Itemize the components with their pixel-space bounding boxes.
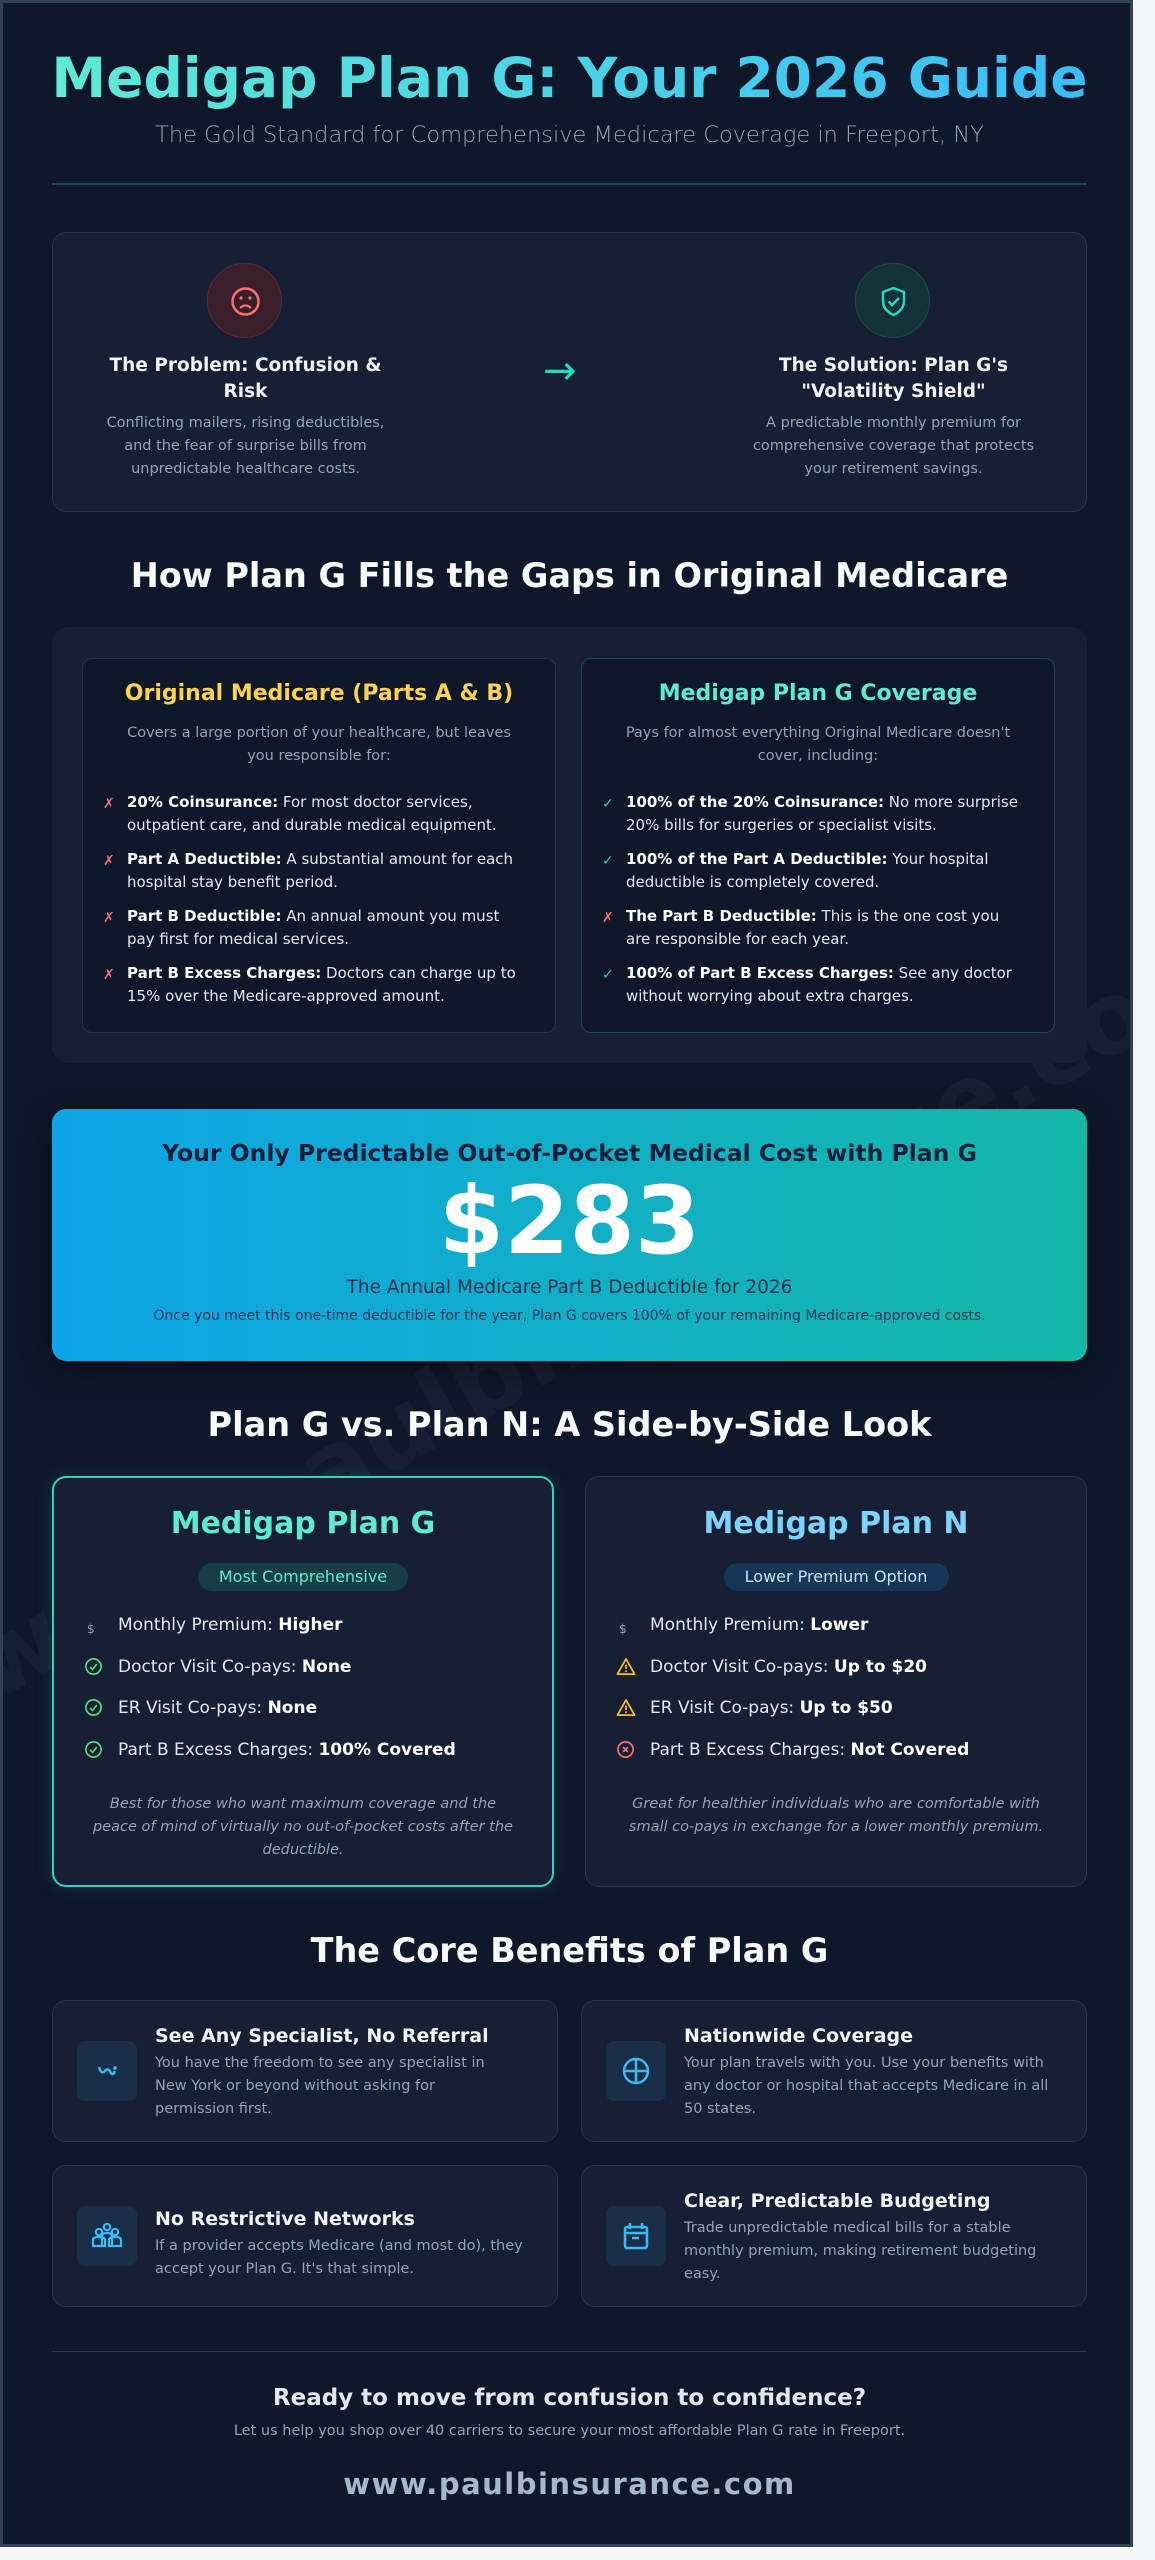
- card: original medicare: Part B Deductible: An annual amount you must pay first for medical services.: [127, 907, 499, 948]
- solution text: A predictable monthly premium for comprehensive coverage that protects your retirement savings.: [753, 415, 1034, 477]
- solution text: The Solution: Plan G's "Volatility Shield": [779, 355, 1008, 402]
- card: plan g coverage: Pays for almost everything Original Medicare doesn't cover, including:: [626, 725, 1010, 764]
- card: original medicare: ✗: [103, 967, 115, 983]
- heading: gaps: How Plan G Fills the Gaps in Original Medicare: [131, 556, 1008, 595]
- card: original medicare: ✗: [103, 796, 115, 812]
- card: plan n: $: [619, 1622, 627, 1636]
- card: plan g: Doctor Visit Co-pays: None: [118, 1656, 351, 1676]
- benefit: budgeting: Clear, Predictable Budgeting: [684, 2190, 990, 2212]
- icon: stethoscope: [77, 2041, 137, 2101]
- card: plan g coverage: 100% of the 20% Coinsurance: No more surprise 20% bills for surgeries or specialist visits.: [626, 793, 1018, 834]
- heading: core benefits: The Core Benefits of Plan G: [311, 1931, 828, 1970]
- problem text: The Problem: Confusion & Risk: [110, 355, 381, 402]
- banner: $283 deductible: Your Only Predictable Out-of-Pocket Medical Cost with Plan G: [162, 1139, 977, 1167]
- card: original medicare: [82, 658, 556, 1033]
- benefit: nationwide: [581, 2000, 1087, 2142]
- card: plan n: [585, 1476, 1087, 1887]
- icon: globe: [606, 2041, 666, 2101]
- banner: $283 deductible: The Annual Medicare Part B Deductible for 2026: [347, 1277, 792, 1298]
- banner: $283 deductible: [52, 1109, 1087, 1361]
- card: plan g coverage: Medigap Plan G Coverage: [659, 681, 977, 706]
- benefit: budgeting: [581, 2165, 1087, 2307]
- benefit: networks: No Restrictive Networks: [155, 2208, 415, 2230]
- card: plan n: Medigap Plan N: [703, 1506, 969, 1541]
- website url: www.paulbinsurance.com: [343, 2467, 796, 2501]
- card: plan n: Monthly Premium: Lower: [650, 1615, 868, 1635]
- card: original medicare: Part A Deductible: A substantial amount for each hospital stay benefit period.: [127, 850, 513, 891]
- benefit: specialist: You have the freedom to see any specialist in New York or beyond without asking for permission first.: [155, 2055, 485, 2117]
- badge: [724, 1563, 948, 1591]
- benefit: networks: [52, 2165, 558, 2307]
- subtitle: The Gold Standard for Comprehensive Medicare Coverage in Freeport, NY: [155, 122, 984, 148]
- banner: $283 deductible: $283: [439, 1167, 700, 1276]
- benefit: networks: If a provider accepts Medicare (and most do), they accept your Plan G. It's that simple.: [155, 2238, 523, 2277]
- card: plan g: Medigap Plan G: [171, 1506, 435, 1541]
- card: original medicare: ✗: [103, 910, 115, 926]
- benefit: specialist: [52, 2000, 558, 2142]
- card: plan g: Best for those who want maximum coverage and the peace of mind of virtually no out-of-pocket costs after the deductible.: [93, 1796, 513, 1858]
- heading: plan g vs n: Plan G vs. Plan N: A Side-by-Side Look: [208, 1405, 931, 1444]
- card: plan g coverage: 100% of Part B Excess Charges: See any doctor without worrying about extra charges.: [626, 964, 1012, 1005]
- title: Medigap Plan G: Your 2026 Guide: [51, 46, 1088, 110]
- card: plan g coverage: ✓: [602, 796, 614, 812]
- card: plan g coverage: 100% of the Part A Deductible: Your hospital deductible is completely covered.: [626, 850, 988, 891]
- card: plan n: ER Visit Co-pays: Up to $50: [650, 1698, 893, 1718]
- cta heading: Ready to move from confusion to confidence?: [273, 2385, 866, 2411]
- icon: sad face: [207, 263, 282, 338]
- badge: Most Comprehensive: [219, 1567, 387, 1586]
- benefit: nationwide: Your plan travels with you. Use your benefits with any doctor or hospital that accepts Medicare in all 50 states.: [684, 2055, 1048, 2117]
- card: original medicare: Original Medicare (Parts A & B): [125, 681, 513, 706]
- icon: people: [77, 2206, 137, 2266]
- card: plan g coverage: ✓: [602, 853, 614, 869]
- card: plan g: $: [87, 1622, 95, 1636]
- card: plan g coverage: ✗: [602, 910, 614, 926]
- card: plan n: Part B Excess Charges: Not Covered: [650, 1740, 969, 1760]
- card: plan g coverage: The Part B Deductible: This is the one cost you are responsible for each year.: [626, 907, 999, 948]
- panel: problem and solution: [52, 232, 1087, 512]
- solution text: [753, 355, 1034, 477]
- icon: shield: [855, 263, 930, 338]
- problem text: [107, 355, 384, 477]
- card: plan n: Doctor Visit Co-pays: Up to $20: [650, 1656, 927, 1676]
- panel: gaps: [52, 627, 1087, 1063]
- card: plan g: Part B Excess Charges: 100% Covered: [118, 1740, 456, 1760]
- card: original medicare: Part B Excess Charges: Doctors can charge up to 15% over the Medicare-approved amount.: [127, 964, 516, 1005]
- badge: Lower Premium Option: [745, 1567, 927, 1586]
- banner: $283 deductible: Once you meet this one-time deductible for the year, Plan G covers 100% of your remaining Medicare-approved costs.: [153, 1308, 986, 1324]
- card: plan n: Great for healthier individuals who are comfortable with small co-pays in exchange for a lower monthly premium.: [629, 1796, 1043, 1835]
- benefit: nationwide: Nationwide Coverage: [684, 2025, 913, 2047]
- card: plan g coverage: [581, 658, 1055, 1033]
- benefit: specialist: See Any Specialist, No Referral: [155, 2025, 489, 2047]
- benefit: budgeting: Trade unpredictable medical bills for a stable monthly premium, making retirement budgeting easy.: [684, 2220, 1036, 2282]
- card: original medicare: Covers a large portion of your healthcare, but leaves you responsible for:: [127, 725, 511, 764]
- card: plan g: Monthly Premium: Higher: [118, 1615, 342, 1635]
- problem text: Conflicting mailers, rising deductibles, and the fear of surprise bills from unpredictable healthcare costs.: [107, 415, 384, 477]
- arrow: →: [543, 348, 577, 394]
- card: original medicare: ✗: [103, 853, 115, 869]
- card: plan g: ER Visit Co-pays: None: [118, 1698, 317, 1718]
- badge: [198, 1563, 408, 1591]
- card: plan g: [52, 1476, 554, 1887]
- card: plan g coverage: ✓: [602, 967, 614, 983]
- cta text: Let us help you shop over 40 carriers to secure your most affordable Plan G rate in Freeport.: [234, 2423, 905, 2439]
- card: original medicare: 20% Coinsurance: For most doctor services, outpatient care, and durable medical equipment.: [127, 793, 497, 834]
- icon: calendar: [606, 2206, 666, 2266]
